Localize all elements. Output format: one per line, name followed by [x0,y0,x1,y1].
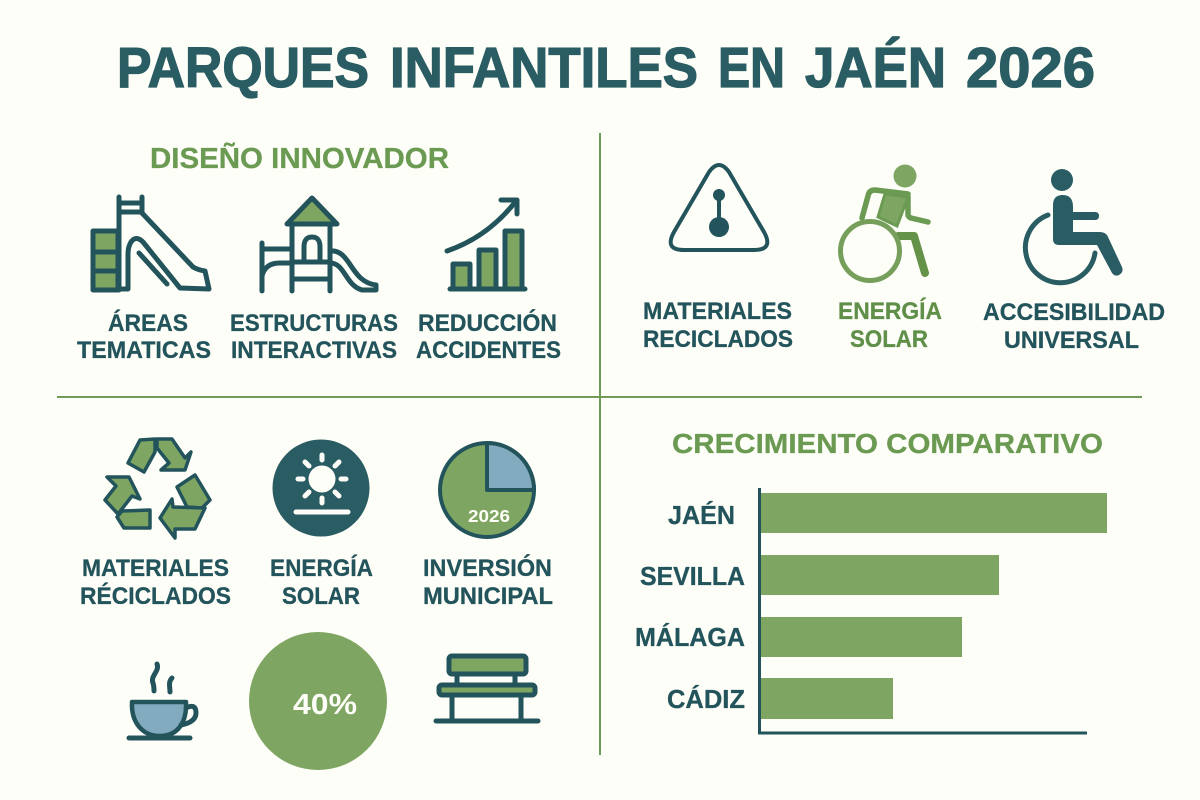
label: áreas temáticas: TEMATICAS [77,337,211,364]
icon: coffee cup [129,664,196,738]
label: inversión municipal: MUNICIPAL [423,583,553,610]
title: PARQUES [117,36,369,100]
label: materiales réciclados: RÉCICLADOS [80,582,231,610]
icon: rising bar chart [447,200,525,289]
icon: green wheelchair figure [840,164,928,280]
label: estructuras interactivas: ESTRUCTURAS [230,310,398,337]
label: energía solar [270,554,373,610]
label: áreas temáticas: ÁREAS [108,309,188,337]
heading: diseño innovador: DISEÑO INNOVADOR [150,141,449,175]
icon: recycle [105,439,210,538]
icon: bench [436,656,538,721]
label: reducción accidentes [416,309,561,364]
label: energía solar: ENERGÍA [270,554,373,582]
title: INFANTILES [390,36,698,100]
title: 2026 [966,36,1095,100]
bar: Jaén: JAÉN [668,500,735,530]
bar: Jaén [668,493,1107,533]
icon: slide [93,197,209,290]
title: JAÉN [805,36,946,100]
label: estructuras interactivas [230,310,398,364]
label: materiales réciclados [80,555,231,610]
heading: crecimiento comparativo: CRECIMIENTO COMPARATIVO [672,428,1103,459]
panel: materiales, energía e inversión [80,439,553,770]
label: energía solar: SOLAR [282,583,360,610]
stat: 40% circle: 40% [293,689,357,721]
icon: play structure [262,198,376,291]
bar: Sevilla [640,555,999,595]
bar: Málaga: MÁLAGA [635,622,745,652]
panel: sostenibilidad y accesibilidad [643,164,1165,354]
bar chart [635,488,1107,733]
bar: Cádiz: CÁDIZ [667,684,745,714]
bar: Cádiz [667,678,893,719]
icon: investment pie 2026: 2026 [468,506,510,526]
label: estructuras interactivas: INTERACTIVAS [231,337,397,364]
label: energía solar [838,297,942,353]
label: inversión municipal: INVERSIÓN [423,554,552,582]
title [117,36,1095,100]
label: materiales reciclados [643,298,793,353]
label: energía solar: SOLAR [850,326,928,353]
label: accesibilidad universal: UNIVERSAL [1004,327,1139,354]
label: reducción accidentes: REDUCCIÓN [418,309,557,337]
icon: warning triangle [671,165,767,250]
label: accesibilidad universal: ACCESIBILIDAD [983,299,1165,326]
title: EN [718,36,785,100]
label: materiales réciclados: MATERIALES [82,555,229,582]
label: inversión municipal [423,554,553,610]
icon: investment pie 2026 [440,443,534,537]
label: materiales reciclados: RECICLADOS [643,326,793,353]
icon: sun circle [272,440,370,536]
label: reducción accidentes: ACCIDENTES [416,337,561,364]
icon: accessibility symbol [1025,169,1123,283]
label: áreas temáticas [77,309,211,364]
bar: Málaga [635,617,962,657]
panel: crecimiento comparativo [635,428,1107,733]
label: energía solar: ENERGÍA [838,297,942,325]
bar: Sevilla: SEVILLA [640,561,745,591]
stat: 40% circle [249,632,387,770]
label: accesibilidad universal [983,299,1165,354]
label: materiales reciclados: MATERIALES [643,298,792,325]
panel: diseño innovador [77,141,561,364]
